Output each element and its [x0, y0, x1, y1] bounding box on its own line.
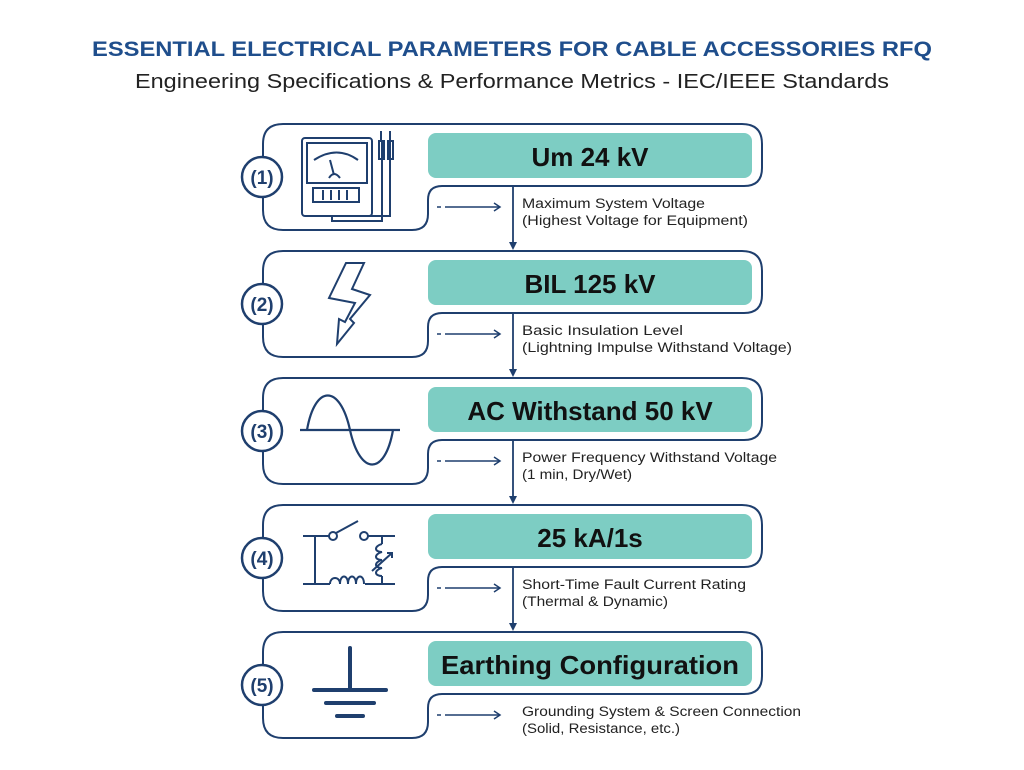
row 4: 25 kA/1s: Short-Time Fault Current Rating: [522, 577, 746, 592]
icon: circuit: [303, 521, 395, 584]
row 5: Earthing: Grounding System & Screen Connection: [522, 704, 801, 719]
row 3: AC withstand: AC Withstand 50 kV: [467, 396, 713, 426]
row 4: 25 kA/1s: (Thermal & Dynamic): [522, 594, 668, 609]
row 1: Um 24 kV: (1): [250, 168, 274, 189]
row 4: 25 kA/1s: 25 kA/1s: [537, 523, 643, 553]
row 5: Earthing: (5): [250, 676, 274, 697]
row 2: BIL 125 kV: (2): [250, 295, 274, 316]
icon: voltmeter: [302, 131, 393, 221]
row 3: AC withstand: Power Frequency Withstand Voltage: [522, 450, 777, 465]
row 3: AC withstand: (3): [250, 422, 274, 443]
row 4: 25 kA/1s: [242, 505, 762, 611]
icon: sine wave: [300, 396, 400, 464]
row 1: Um 24 kV: (Highest Voltage for Equipment): [522, 213, 748, 228]
row 5: Earthing: [242, 632, 801, 738]
row 5: Earthing: Earthing Configuration: [441, 650, 739, 680]
arrow 3-4: [509, 440, 517, 504]
row 1: Um 24 kV: Maximum System Voltage: [522, 196, 705, 211]
subtitle: Engineering Specifications & Performance Metrics - IEC/IEEE Standards: [135, 71, 889, 93]
row 2: BIL 125 kV: Basic Insulation Level: [522, 323, 683, 338]
icon: lightning: [329, 263, 370, 344]
row 3: AC withstand: [242, 378, 777, 484]
row 2: BIL 125 kV: BIL 125 kV: [524, 269, 656, 299]
row 3: AC withstand: (1 min, Dry/Wet): [522, 467, 632, 482]
row 4: 25 kA/1s: (4): [250, 549, 274, 570]
arrow 2-3: [509, 313, 517, 377]
title: ESSENTIAL ELECTRICAL PARAMETERS FOR CABLE ACCESSORIES RFQ: [92, 38, 932, 61]
row 2: BIL 125 kV: (Lightning Impulse Withstand Voltage): [522, 340, 792, 355]
icon: ground: [314, 648, 386, 716]
arrow 1-2: [509, 186, 517, 250]
row 1: Um 24 kV: Um 24 kV: [531, 142, 649, 172]
row 2: BIL 125 kV: [242, 251, 792, 357]
row 1: Um 24 kV: [242, 124, 762, 230]
row 5: Earthing: (Solid, Resistance, etc.): [522, 721, 680, 736]
arrow 4-5: [509, 567, 517, 631]
